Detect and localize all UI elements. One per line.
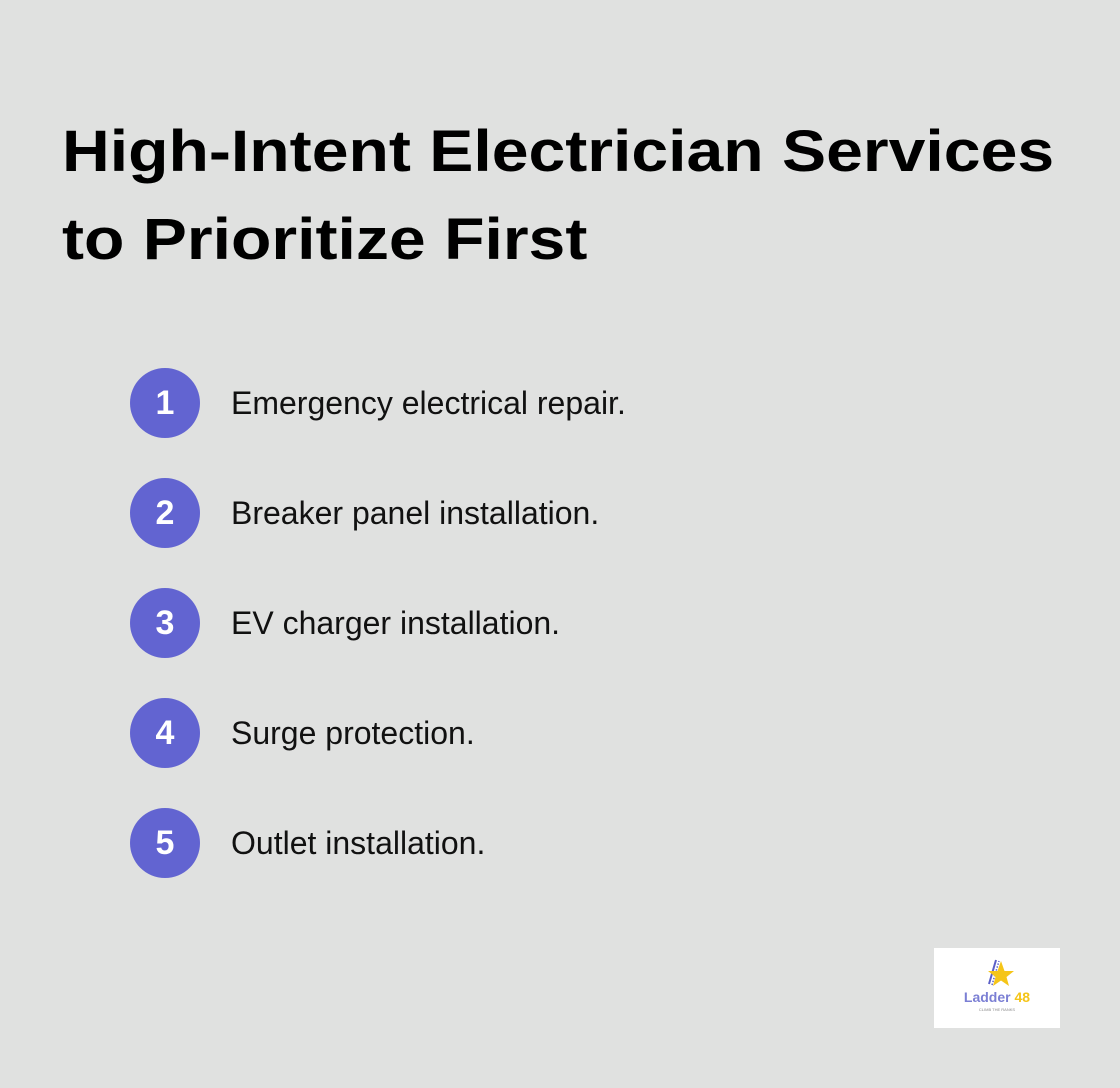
title: High-Intent Electrician Services	[62, 119, 1054, 184]
item 3: 3	[156, 604, 174, 642]
item 5: Outlet installation.	[231, 825, 485, 861]
logo: CLIMB THE RANKS	[979, 1007, 1015, 1012]
logo: Ladder 48	[964, 989, 1030, 1005]
item 1	[130, 368, 626, 438]
item 3	[130, 588, 560, 658]
item 4: Surge protection.	[231, 715, 475, 751]
item 1: 1	[156, 384, 174, 422]
item 2	[130, 478, 599, 548]
item 5: 5	[156, 824, 174, 862]
item 2: 2	[156, 494, 174, 532]
item 4	[130, 698, 475, 768]
item 2: Breaker panel installation.	[231, 495, 599, 531]
logo	[934, 948, 1060, 1028]
title: to Prioritize First	[62, 207, 587, 272]
item 4: 4	[156, 714, 174, 752]
item 3: EV charger installation.	[231, 605, 560, 641]
item 5	[130, 808, 485, 878]
item 1: Emergency electrical repair.	[231, 385, 626, 421]
title	[62, 119, 1054, 272]
